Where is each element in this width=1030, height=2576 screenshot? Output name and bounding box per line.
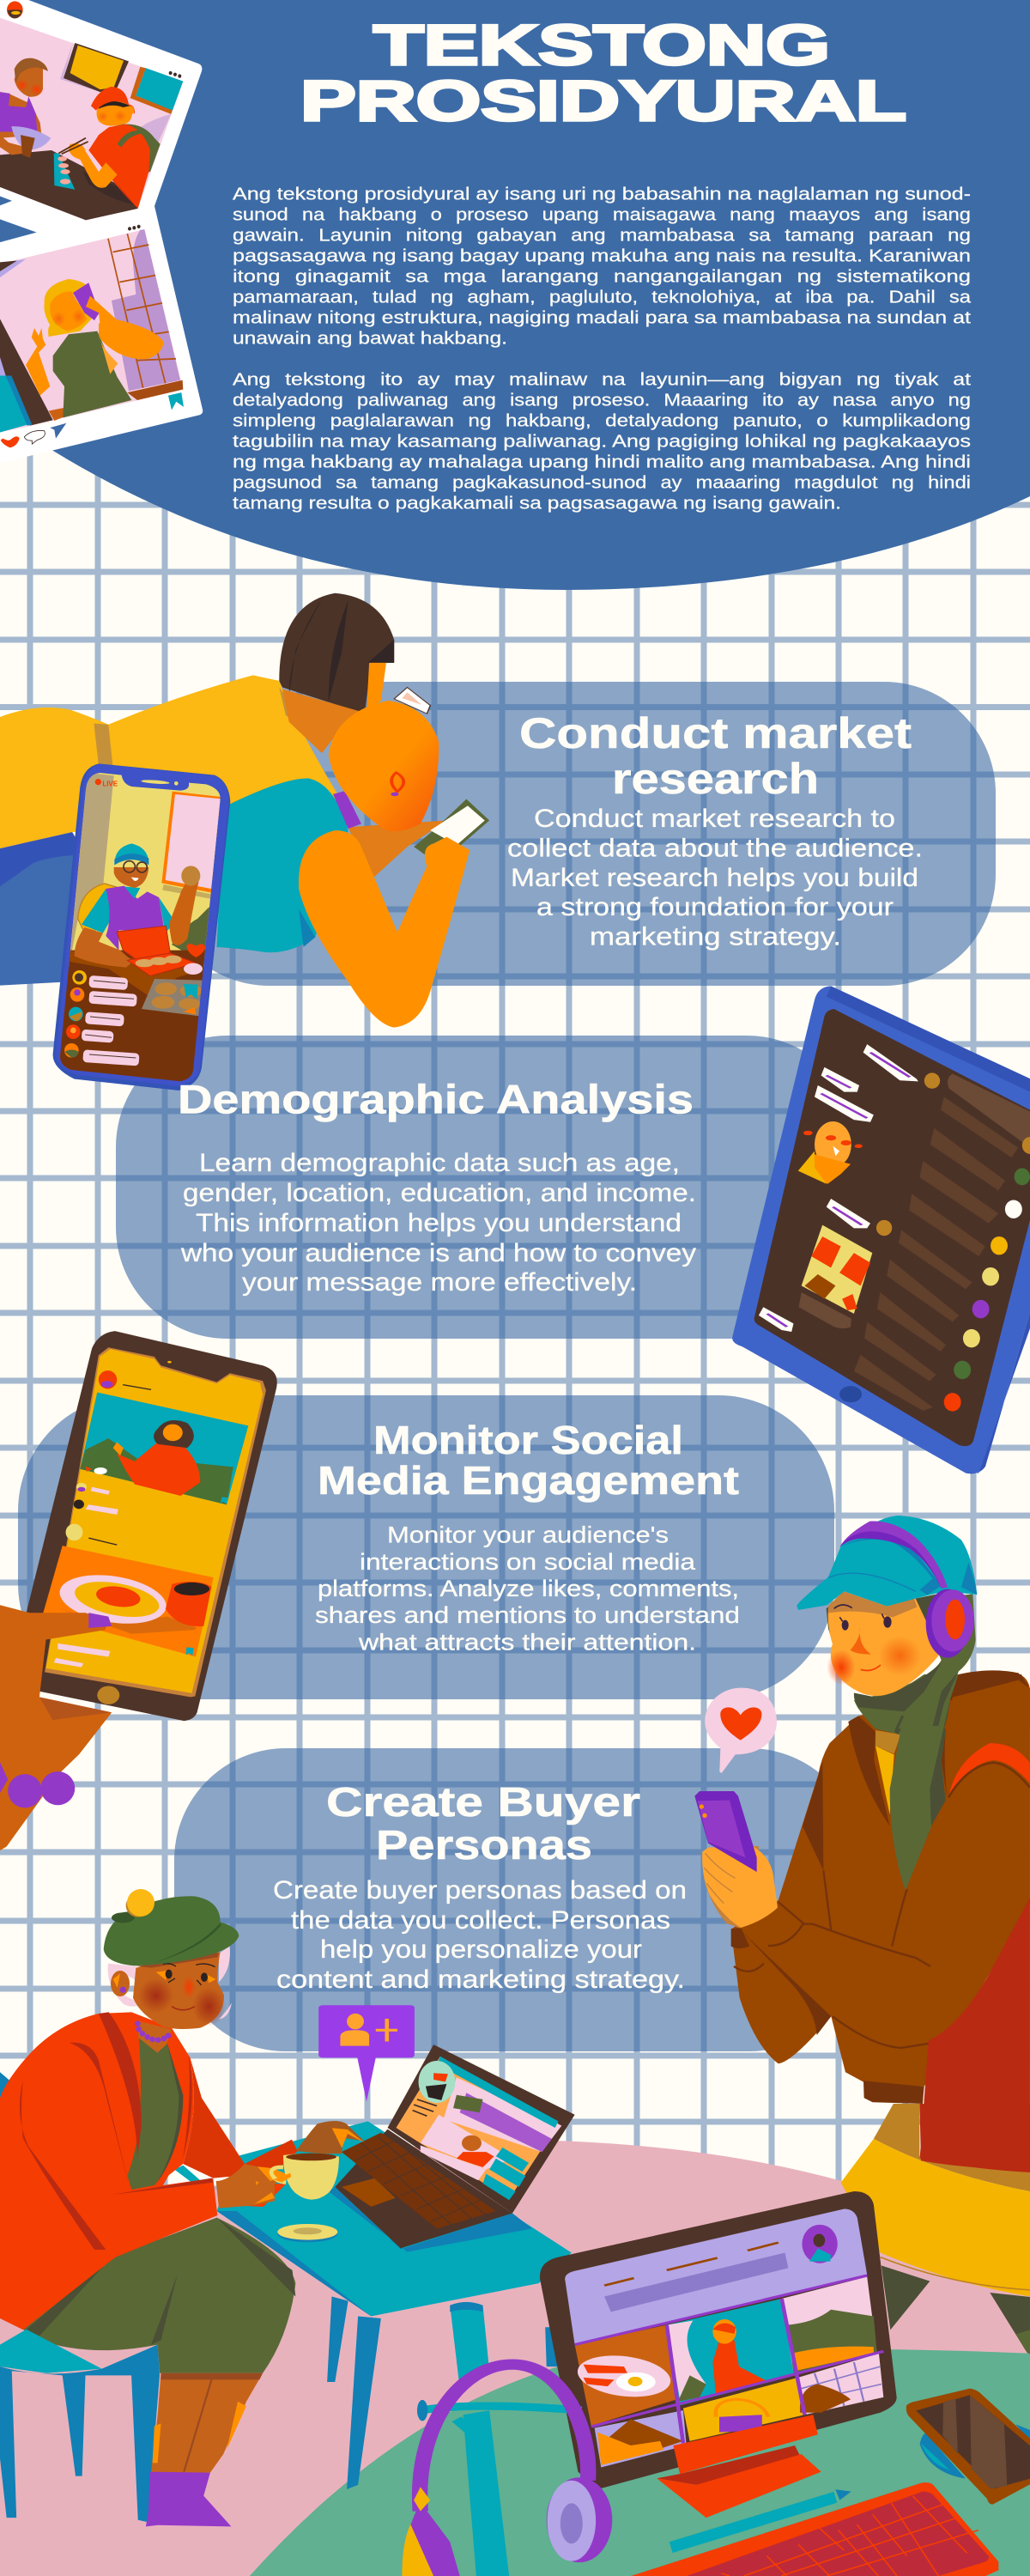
panel: monitor social media engagement: interactions on social media [360,1549,695,1575]
text block: first paragraph: malinaw nitong estruktura, nagiging madali para sa mambabasa na sundan at [233,309,972,328]
text block: first paragraph: itong ginagamit sa mga larangang nangangailangan ng sistematikong [233,268,971,287]
icon: heart speech bubble [705,1688,777,1773]
illustration: person with headphones holding phone [694,1516,1030,2354]
panel: create buyer personas: Personas [376,1823,592,1868]
panel: monitor social media engagement: Media Engagement [318,1458,739,1503]
illustration: keyboard, pen and phone on desk [631,2389,1030,2576]
title [300,13,906,132]
text block: second paragraph: Ang tekstong ito ay may malinaw na layunin—ang bigyan ng tiyak at [233,371,972,390]
panel: demographic analysis: your message more effectively. [242,1268,637,1297]
text block: first paragraph [233,185,972,349]
heading: demographic analysis: Demographic Analysis [178,1077,694,1121]
panel: create buyer personas: Create Buyer [326,1780,640,1826]
panel: conduct market research: research [612,755,819,803]
text block: first paragraph: gawain. Layunin nitong gabayan ang mambabasa sa tamang paraan ng [233,227,971,246]
illustration: hand holding phone with social feed [0,1331,277,1850]
panel: conduct market research: marketing strategy. [590,922,841,951]
panel: conduct market research: Market research helps you build [511,864,918,892]
panel: create buyer personas: the data you collect. Personas [291,1906,670,1935]
text block: first paragraph: unawain ang bawat hakbang. [233,330,507,349]
panel: create buyer personas: help you personalize your [320,1935,642,1964]
text block: second paragraph: tamang resulta o pagkakamali sa pagsasagawa ng isang gawain. [233,495,841,513]
panel: monitor social media engagement: platforms. Analyze likes, comments, [318,1576,739,1601]
illustration: tablet with chat screen [732,986,1030,1473]
text block: second paragraph: detalyadong paliwanag ang isang proseso. Maaaring ito ay nasa anyo ng [233,392,971,410]
panel: demographic analysis: This information helps you understand [196,1209,682,1237]
panel: monitor social media engagement: shares and mentions to understand [315,1602,740,1628]
panel: conduct market research: a strong foundation for your [536,893,894,921]
panel: demographic analysis: gender, location, education, and income. [183,1179,696,1207]
icon: purple add-user bubble [318,2005,415,2101]
panel: demographic analysis: who your audience is and how to convey [180,1239,696,1267]
illustration: phone with live cooking stream [52,763,230,1091]
panel: demographic analysis: Learn demographic data such as age, [199,1149,680,1177]
text block: second paragraph [233,371,972,513]
header panel: blue curved banner [0,0,1030,590]
illustration: phone with live cooking stream: LIVE [102,780,118,787]
illustration: woman with laptop at table [0,1889,575,2526]
text block: first paragraph: sunod na hakbang o proseso upang maisagawa nang maayos ang isang [233,206,971,225]
panel: monitor social media engagement: Monitor Social [373,1418,683,1462]
title: TEKSTONG [373,13,830,76]
text block: second paragraph: simpleng paglalarawan ng hakbang, detalyadong panuto, o kumplikadong [233,412,971,431]
panel: conduct market research: collect data about the audience. [507,835,923,862]
panel: monitor social media engagement [18,1395,834,1699]
panel: conduct market research [158,682,996,986]
panel: create buyer personas: content and marketing strategy. [276,1965,685,1994]
panel: conduct market research: Conduct market research to [534,805,895,833]
panel: monitor social media engagement: Monitor your audience's [387,1522,669,1547]
illustration: desktop tablet with photo grid [540,2191,897,2518]
text block: first paragraph: Ang tekstong prosidyural ay isang uri ng babasahin na naglalaman ng sunod- [233,185,971,204]
text block: second paragraph: pagsunod sa tamang pagkakasunod-sunod ay maaaring magdulot ng hindi [233,474,971,493]
text block: second paragraph: tagubilin na may kasamang paliwanag. Ang pagiging lohikal ng pagkakaayos [233,433,971,452]
illustration: headphones and teal stand [402,2365,612,2576]
text block: second paragraph: ng mga hakbang ay mahalaga upang hindi malito ang mambabasa. Ang hindi [233,453,971,472]
panel: demographic analysis [116,1036,858,1339]
illustration: social media photo cards [0,0,203,463]
panel: create buyer personas: Create buyer personas based on [273,1876,687,1905]
title: PROSIDYURAL [300,69,906,132]
ground shapes: pink and green floor [0,2141,1030,2576]
panel: monitor social media engagement: what attracts their attention. [358,1630,696,1656]
panel: create buyer personas [174,1748,861,2051]
illustration: woman lying down with phone [0,593,489,1028]
text block: first paragraph: pamamaraan, tulad ng agham, pagluluto, teknolohiya, at iba pa. Dahil sa [233,289,972,307]
panel: conduct market research: Conduct market [519,709,912,757]
text block: first paragraph: pagsasagawa ng isang bagay upang makuha ang nais na resulta. Karaniwan [233,247,971,266]
